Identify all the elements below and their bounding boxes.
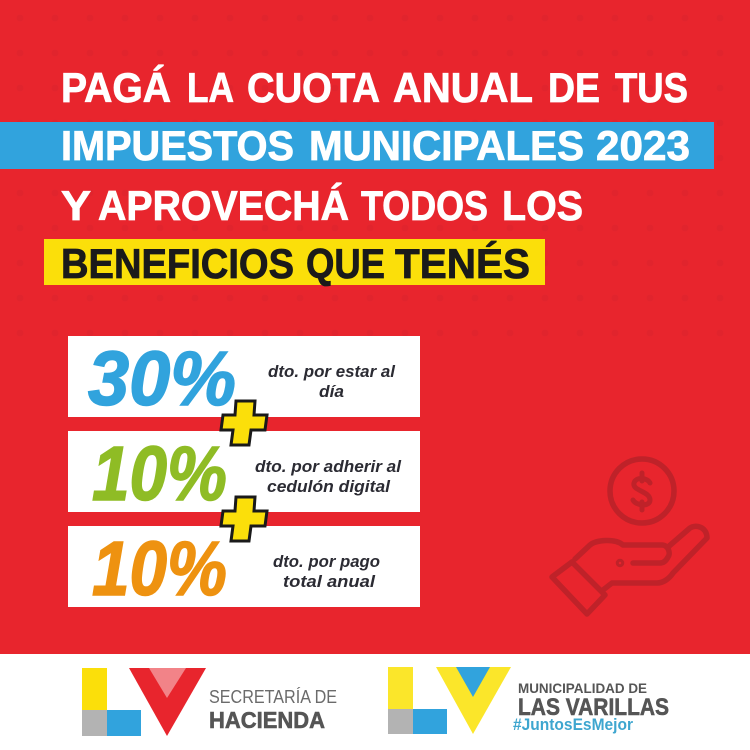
title line 4: BENEFICIOS	[61, 240, 294, 287]
label 30: dto. por estar al	[268, 362, 396, 381]
title line 3: Y	[61, 182, 91, 229]
label annual	[273, 552, 380, 591]
percent 10 orange: 10%	[92, 526, 227, 612]
text: Secretaría de: SECRETARÍA DE	[209, 687, 337, 707]
title line 4: QUE	[306, 240, 385, 287]
title line 1: CUOTA	[247, 64, 380, 111]
label 30: día	[319, 382, 344, 401]
blue highlight band	[0, 122, 714, 169]
title line 4	[61, 240, 530, 287]
percent 30: 30%	[88, 336, 236, 422]
panel: 10% digital discount	[68, 431, 420, 517]
percent 10 green: 10%	[92, 431, 227, 517]
label annual: total anual	[283, 572, 376, 591]
title line 3: LOS	[502, 182, 583, 229]
title line 4: TENÉS	[395, 240, 530, 287]
icon: hand holding coin	[552, 459, 707, 614]
text: hashtag: #JuntosEsMejor	[513, 715, 633, 734]
icon: plus two	[221, 497, 267, 541]
label annual: dto. por pago	[273, 552, 380, 571]
yellow highlight band	[44, 239, 545, 285]
label digital: cedulón digital	[267, 477, 391, 496]
title line 1	[61, 64, 688, 111]
title line 3	[61, 182, 583, 229]
icon: plus one	[221, 401, 267, 445]
label digital: dto. por adherir al	[255, 457, 402, 476]
title line 2: IMPUESTOS	[61, 122, 294, 169]
title line 1: PAGÁ	[61, 64, 171, 111]
logo: Secretaría de Hacienda	[82, 668, 337, 736]
title line 3: TODOS	[361, 182, 488, 229]
text: Municipalidad de: MUNICIPALIDAD DE	[518, 680, 647, 696]
panel: 10% annual discount	[68, 526, 420, 612]
logo: Municipalidad de Las Varillas	[388, 667, 669, 734]
label digital	[255, 457, 402, 496]
title block	[0, 64, 714, 287]
title line 1: ANUAL	[393, 64, 533, 111]
title line 2: MUNICIPALES	[309, 122, 584, 169]
title line 1: LA	[187, 64, 234, 111]
title line 2	[61, 122, 690, 169]
label 30	[268, 362, 396, 401]
title line 3: APROVECHÁ	[98, 182, 349, 229]
text: Las Varillas: LAS VARILLAS	[518, 694, 669, 721]
title line 2: 2023	[596, 122, 690, 169]
title line 1: TUS	[615, 64, 688, 111]
panel: footer	[0, 654, 750, 750]
title line 1: DE	[548, 64, 600, 111]
text: Hacienda: HACIENDA	[209, 707, 325, 733]
panel: 30% discount	[68, 336, 420, 422]
